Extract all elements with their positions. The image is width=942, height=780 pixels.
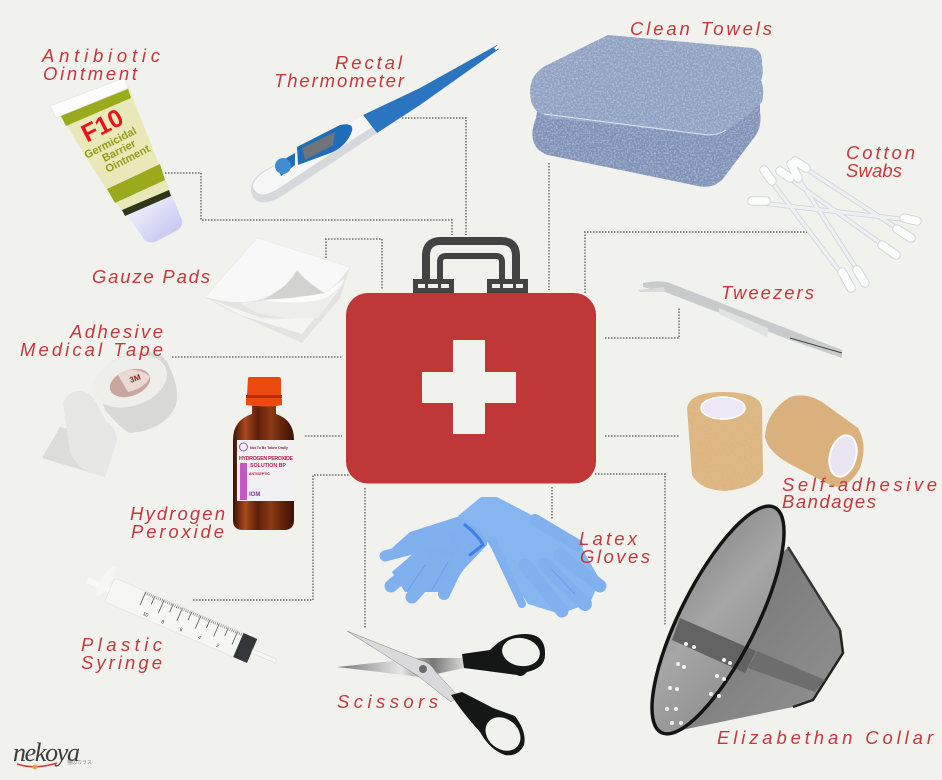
item: hydrogen peroxide bottle: SOLUTION BP: [250, 463, 286, 469]
icon: first aid kit: [346, 241, 596, 484]
label: self-adhesive bandages: Bandages: [782, 491, 876, 512]
label: hydrogen peroxide: [130, 503, 225, 542]
item: adhesive medical tape: 3M: [128, 372, 142, 385]
item: latex gloves: [385, 497, 600, 614]
label: antibiotic ointment: Antibiotic: [41, 45, 161, 66]
item: antibiotic ointment tube: Ointment: [104, 143, 152, 176]
item: adhesive medical tape: [42, 345, 177, 477]
label: latex gloves: [579, 528, 650, 567]
item: hydrogen peroxide bottle: HYDROGEN PEROXIDE: [239, 456, 293, 462]
item: gauze pads: [205, 238, 350, 343]
label: plastic syringe: Syringe: [81, 652, 162, 673]
item: antibiotic ointment tube: Germicidal: [83, 125, 139, 162]
item: self-adhesive bandages: [687, 392, 864, 491]
label: tweezers: Tweezers: [721, 282, 814, 303]
label: gauze pads: Gauze Pads: [92, 266, 210, 287]
label: plastic syringe: [81, 634, 163, 673]
label: rectal thermometer: Thermometer: [274, 70, 405, 91]
logo: nekoya: nekoya: [13, 738, 80, 767]
item: cotton swabs: [752, 161, 918, 288]
label: cotton swabs: Cotton: [846, 142, 915, 163]
label: scissors: Scissors: [337, 691, 438, 712]
item: plastic syringe: 10: [142, 611, 149, 619]
label: antibiotic ointment: [41, 45, 161, 84]
item: hydrogen peroxide bottle: ANTISEPTIC: [249, 472, 270, 476]
logo: nekoya: 猫のカラス: [67, 759, 92, 766]
item: clean towels: [530, 35, 763, 187]
label: rectal thermometer: [274, 52, 405, 91]
label: adhesive medical tape: Adhesive: [69, 321, 163, 342]
label: latex gloves: Latex: [579, 528, 638, 549]
label: self-adhesive bandages: [782, 474, 937, 512]
label: self-adhesive bandages: Self-adhesive: [782, 474, 937, 495]
item: antibiotic ointment tube: Barrier: [100, 137, 139, 165]
item: hydrogen peroxide bottle: [233, 377, 294, 530]
label: clean towels: Clean Towels: [630, 18, 772, 39]
label: Elizabethan collar: Elizabethan Collar: [717, 727, 934, 748]
label: hydrogen peroxide: Peroxide: [131, 521, 224, 542]
label: cotton swabs: Swabs: [846, 160, 902, 181]
label: adhesive medical tape: [20, 321, 163, 360]
label: hydrogen peroxide: Hydrogen: [130, 503, 225, 524]
item: plastic syringe: 8: [160, 619, 165, 626]
label: cotton swabs: [846, 142, 915, 181]
item: plastic syringe: 6: [178, 627, 184, 634]
label: adhesive medical tape: Medical Tape: [20, 339, 163, 360]
item: antibiotic ointment tube: F10: [77, 104, 128, 148]
item: plastic syringe: 4: [197, 635, 202, 641]
item: scissors: [337, 631, 545, 758]
item: plastic syringe: [82, 559, 285, 673]
item: Elizabethan collar: [627, 490, 843, 750]
item: plastic syringe: 2: [215, 643, 220, 649]
item: antibiotic ointment tube: [50, 78, 182, 242]
item: hydrogen peroxide bottle: Not To Be Taken Orally: [250, 446, 288, 450]
connector lines: [165, 118, 808, 629]
label: rectal thermometer: Rectal: [335, 52, 403, 73]
item: rectal thermometer: [251, 45, 499, 202]
item: hydrogen peroxide bottle: IOM: [249, 492, 260, 498]
label: latex gloves: Gloves: [580, 546, 650, 567]
item: tweezers: [638, 281, 842, 358]
label: plastic syringe: Plastic: [81, 634, 163, 655]
label: antibiotic ointment: Ointment: [43, 63, 138, 84]
